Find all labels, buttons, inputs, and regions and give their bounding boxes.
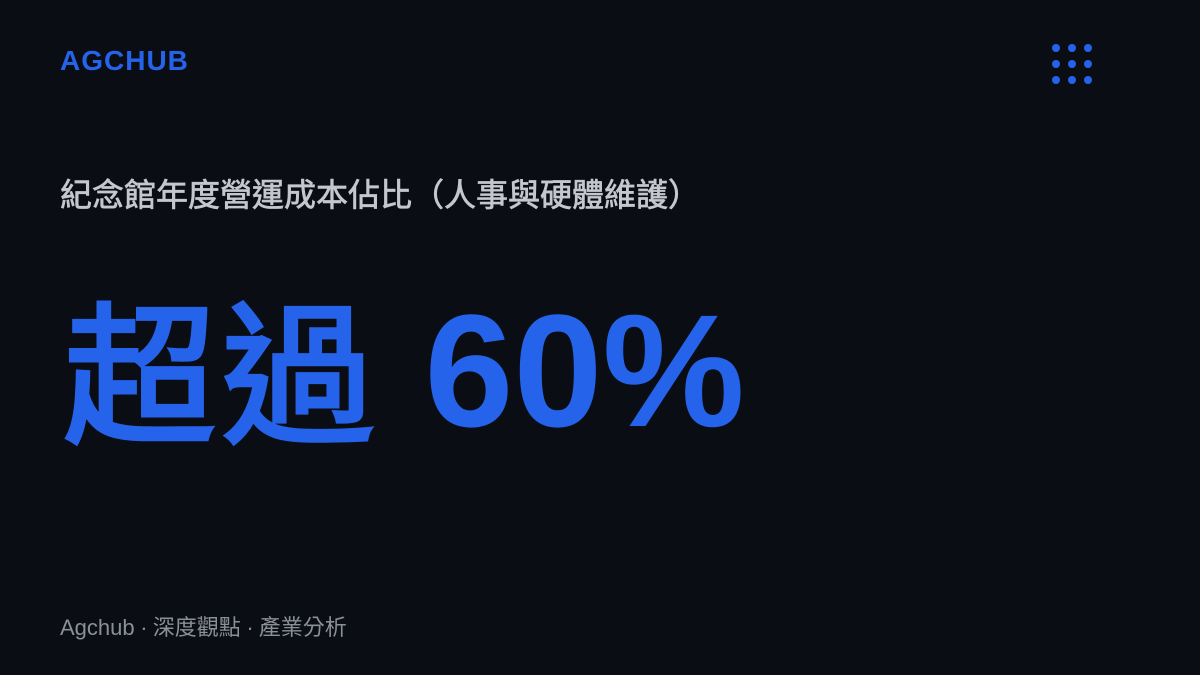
logo: AGCHUB — [60, 45, 189, 76]
headline statistic: 超過 60% — [63, 281, 745, 464]
footer: Agchub · 深度觀點 · 產業分析 — [60, 615, 347, 640]
icon: dot grid — [1052, 44, 1092, 84]
subtitle: 紀念館年度營運成本佔比（人事與硬體維護） — [60, 177, 700, 213]
